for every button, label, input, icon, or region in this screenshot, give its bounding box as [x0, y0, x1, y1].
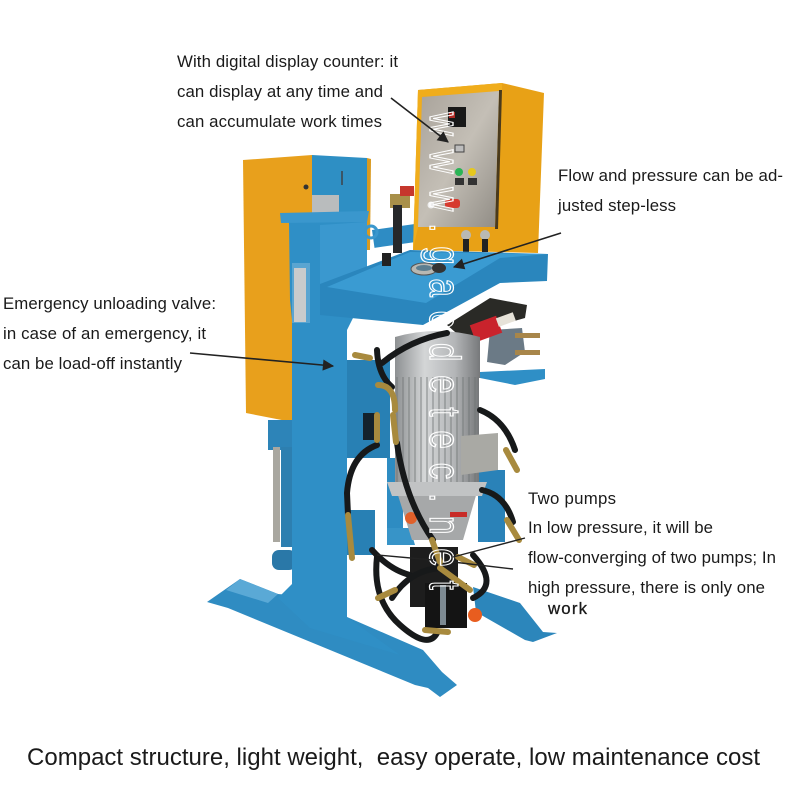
callout: digital display counter: can accumulate work times [177, 112, 382, 131]
back uprights [347, 360, 505, 555]
callout: two pumps: flow-converging of two pumps; In [528, 548, 776, 567]
watermark: www.gaodetec.net [420, 111, 468, 590]
callout: emergency unloading valve [3, 294, 333, 373]
main column [278, 211, 429, 655]
callout: two pumps: work [547, 599, 588, 618]
callout: digital display counter: can display at any time and [177, 82, 383, 101]
callout: digital display counter: With digital display counter: it [177, 52, 398, 71]
callout: flow and pressure: justed step-less [557, 196, 676, 215]
callout: two pumps: In low pressure, it will be [528, 518, 713, 537]
left cabinet [243, 155, 371, 425]
right control box [413, 83, 544, 253]
steel panel [418, 91, 499, 227]
hoses and brass fittings [347, 333, 519, 640]
callout: digital display counter [177, 52, 448, 142]
callout: flow and pressure [454, 166, 783, 267]
callout: two pumps: high pressure, there is only one [528, 578, 765, 597]
bottom caption: Compact structure, light weight, easy operate, low maintenance cost [27, 744, 760, 771]
motor [387, 331, 498, 540]
callout: two pumps [377, 489, 776, 618]
base frame [207, 528, 557, 697]
callout: flow and pressure: Flow and pressure can be ad- [558, 166, 783, 185]
right valves [447, 298, 545, 385]
pump block [410, 547, 482, 628]
callout: emergency unloading valve: in case of an emergency, it [3, 324, 206, 343]
left cylinder [268, 420, 296, 570]
top fittings [390, 186, 414, 253]
callout: two pumps: Two pumps [528, 489, 616, 508]
callout: emergency unloading valve: Emergency unloading valve: [3, 294, 216, 313]
machine photo illustration [207, 83, 557, 697]
callout: emergency unloading valve: can be load-off instantly [3, 354, 183, 373]
top shelf [320, 250, 548, 325]
